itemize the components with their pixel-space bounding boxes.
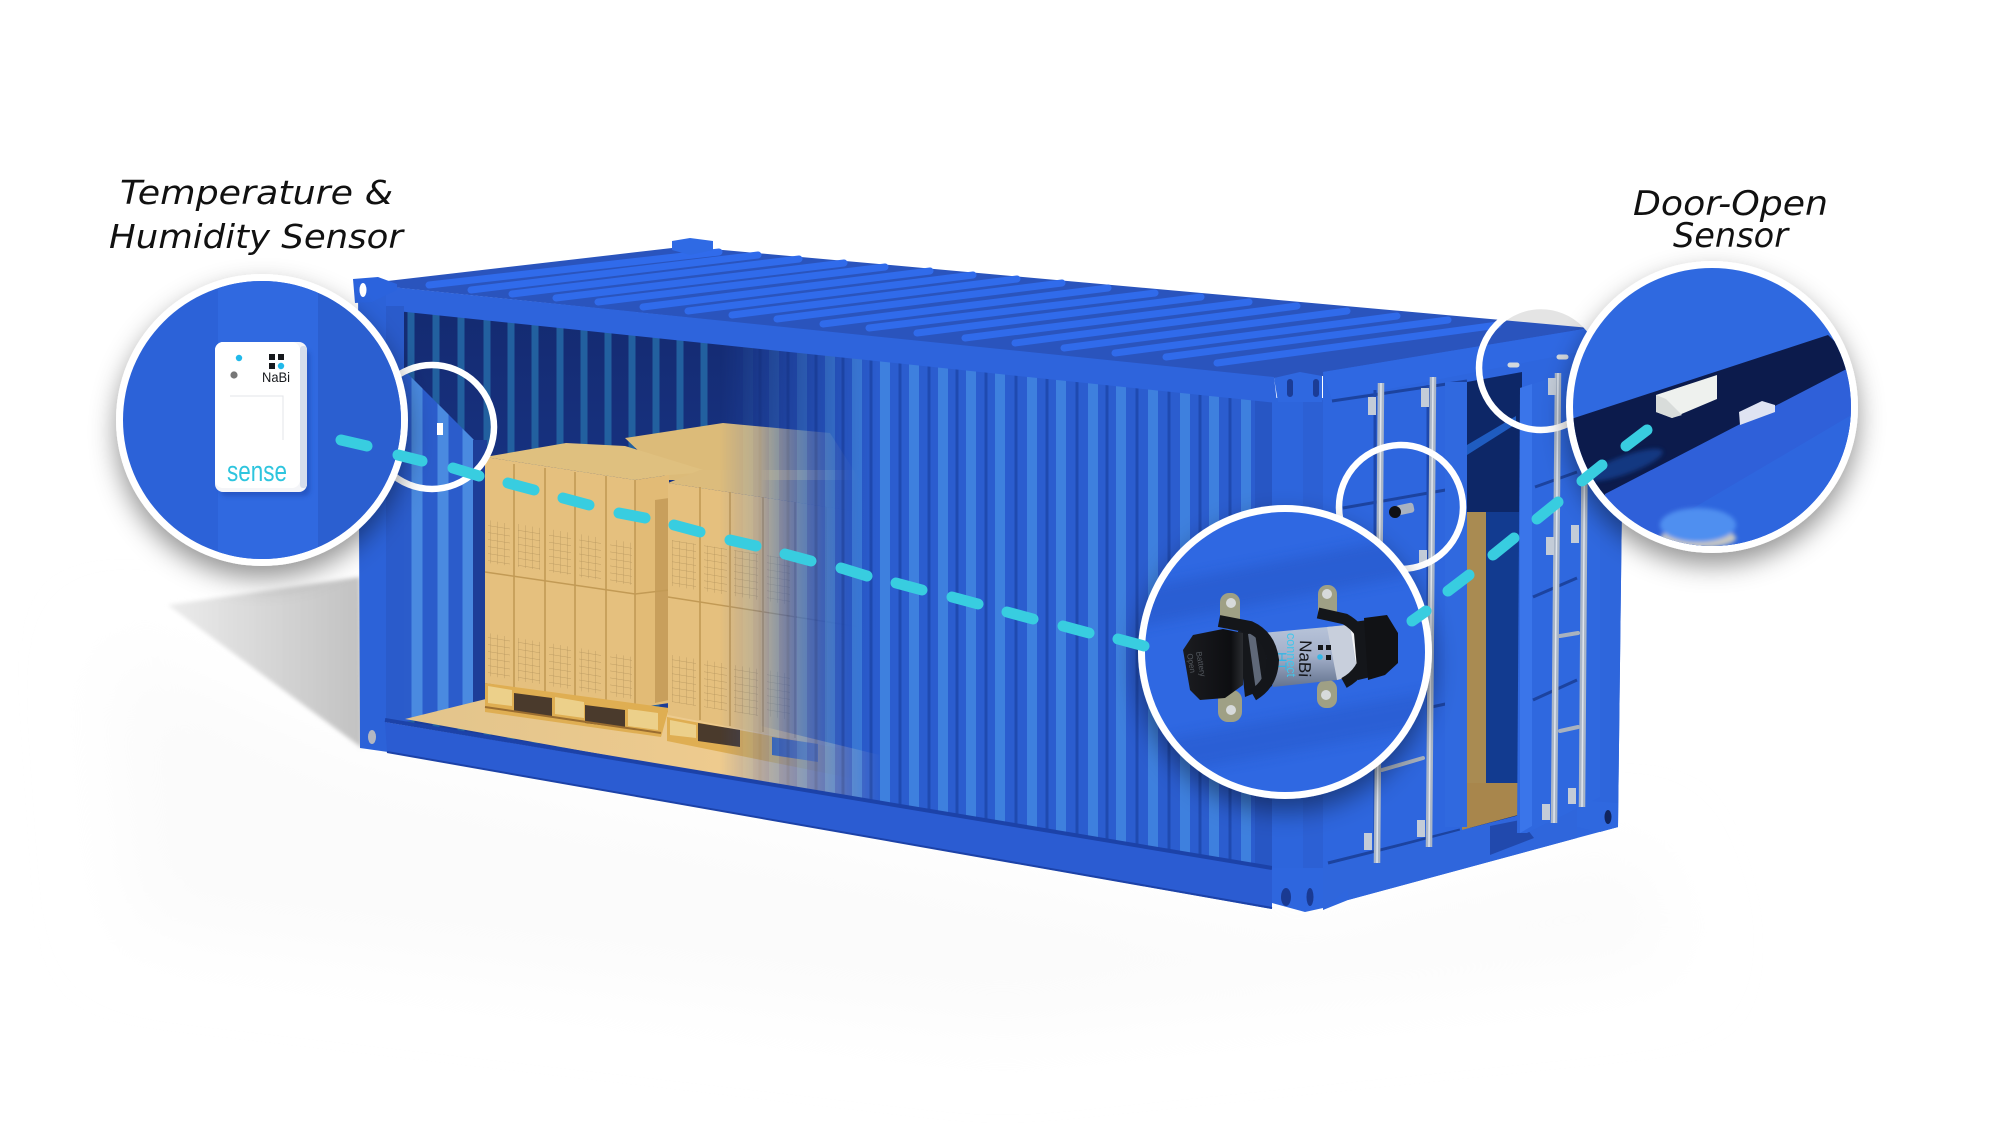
interior corrugation stripes [411, 300, 704, 760]
logo on body [1317, 645, 1331, 660]
corrugation light stripes [769, 350, 1251, 862]
small ring: connect sensor location [1339, 445, 1463, 569]
left end cap [1183, 629, 1243, 700]
printed label [1327, 625, 1357, 680]
open door [1517, 362, 1600, 833]
small ring: temperature sensor location [370, 365, 494, 489]
blue status LED [236, 355, 242, 361]
inner door blue [1485, 512, 1521, 784]
cargo: far pallet stack [667, 470, 843, 772]
mounting plates [1218, 585, 1337, 722]
soft floor shading [110, 640, 1680, 1030]
casting holes [1290, 382, 1316, 394]
grey sensor port [230, 371, 238, 379]
door end face [1323, 328, 1622, 910]
blurred bolt [1660, 508, 1736, 548]
floor seen through opening [1462, 783, 1518, 830]
lit stripes [417, 350, 468, 720]
cylinder body [1262, 624, 1364, 687]
side wall exterior corrugation [726, 346, 1272, 869]
NaBi label: NaBi [262, 369, 290, 385]
zoom circle: temperature and humidity sensor [110, 270, 420, 570]
floor [405, 699, 874, 799]
carton lines [514, 464, 635, 708]
door frame ridge [1692, 416, 1851, 546]
right clamp [1318, 613, 1366, 683]
container roof [362, 248, 1590, 378]
top casting [1274, 372, 1322, 402]
cargo seen through opening [1462, 512, 1486, 790]
white barcode label [1350, 624, 1366, 672]
label: temperature and humidity sensor [109, 173, 406, 256]
shaded strip at corner [1255, 401, 1272, 866]
infographic: shipping container with sensors [99, 180, 1875, 912]
cargo: near pallet stack [484, 443, 669, 737]
NaBi body text: NaBi [1295, 640, 1315, 678]
label: temperature and humidity sensor: Temperature & [120, 173, 393, 212]
post hole [368, 730, 376, 744]
small ring: door-open sensor location [1479, 306, 1603, 430]
wing nuts [1510, 357, 1566, 365]
door panel shading [1147, 540, 1406, 628]
zoom circle: connect cylinder sensor [1130, 500, 1440, 810]
dark door gap [1565, 335, 1860, 500]
right corner post [1577, 340, 1622, 832]
lower door frame [1604, 370, 1851, 546]
collar silver ring [1248, 633, 1263, 691]
shadow under open door [1490, 820, 1534, 855]
top door rail [1323, 328, 1590, 400]
door opening [1462, 372, 1522, 833]
dark gap beside cargo [473, 440, 487, 702]
left clamp [1219, 621, 1273, 695]
right collar [1353, 620, 1375, 680]
faint panel outline [230, 396, 283, 440]
far pallet [667, 717, 822, 772]
rod hinges [1368, 378, 1575, 850]
tiny white sensor on wall [437, 423, 443, 435]
cargo: rear stack [625, 423, 860, 480]
blurred reflections in gap [1593, 447, 1664, 483]
small circle backdrop: door corner [1479, 306, 1603, 430]
sense label: sense [227, 456, 287, 488]
label: door-open sensor: Door-Open [1633, 184, 1828, 224]
top casting [353, 277, 397, 303]
tiny cylinder sensor [1389, 502, 1415, 518]
carton print grids [488, 520, 510, 566]
near corner base casting [1272, 868, 1323, 912]
cylinder sensor [1183, 585, 1398, 722]
NaBi logo mark [269, 354, 284, 369]
top side rail [372, 285, 1277, 403]
shipping container [353, 238, 1622, 912]
left collar [1238, 631, 1272, 697]
locking rods [1377, 373, 1585, 863]
bottom door sill [1323, 800, 1577, 910]
left corner post [353, 277, 404, 752]
box front [485, 457, 635, 708]
battery text on cap: Battery [1194, 651, 1207, 677]
lit interior wall [398, 374, 474, 722]
rod highlight [1377, 373, 1585, 863]
corrugation dark lines [786, 352, 1232, 860]
side wall interior [386, 312, 875, 798]
highlight strip [1467, 416, 1516, 455]
pallet [485, 683, 669, 737]
roof ribs [429, 252, 1498, 363]
label: door-open sensor [1633, 184, 1828, 256]
label: temperature and humidity sensor: Humidity Sensor [109, 217, 406, 256]
connect body text: connect [1284, 633, 1299, 677]
right end cap [1364, 615, 1398, 680]
side shade [655, 498, 669, 703]
box side [635, 475, 669, 708]
bottom side rail [385, 720, 1272, 909]
sensor device [215, 342, 310, 496]
door latches [1382, 633, 1578, 770]
container ground shadow [168, 577, 362, 748]
casting hole [360, 283, 366, 297]
near corner post [1272, 372, 1323, 870]
connecting dashed line [341, 430, 1647, 646]
HT body text: HT [1274, 652, 1290, 671]
magnet sensor body [1656, 375, 1717, 418]
label: door-open sensor: Sensor [1673, 216, 1790, 256]
rear corner casting [672, 238, 713, 255]
open text on cap: Open [1185, 653, 1197, 674]
magnet sensor counterpart [1739, 401, 1775, 425]
box tops [490, 443, 664, 480]
left door details [1328, 381, 1467, 863]
wall corrugation band [218, 270, 318, 570]
zoom circle: door-open sensor [1560, 255, 1865, 560]
